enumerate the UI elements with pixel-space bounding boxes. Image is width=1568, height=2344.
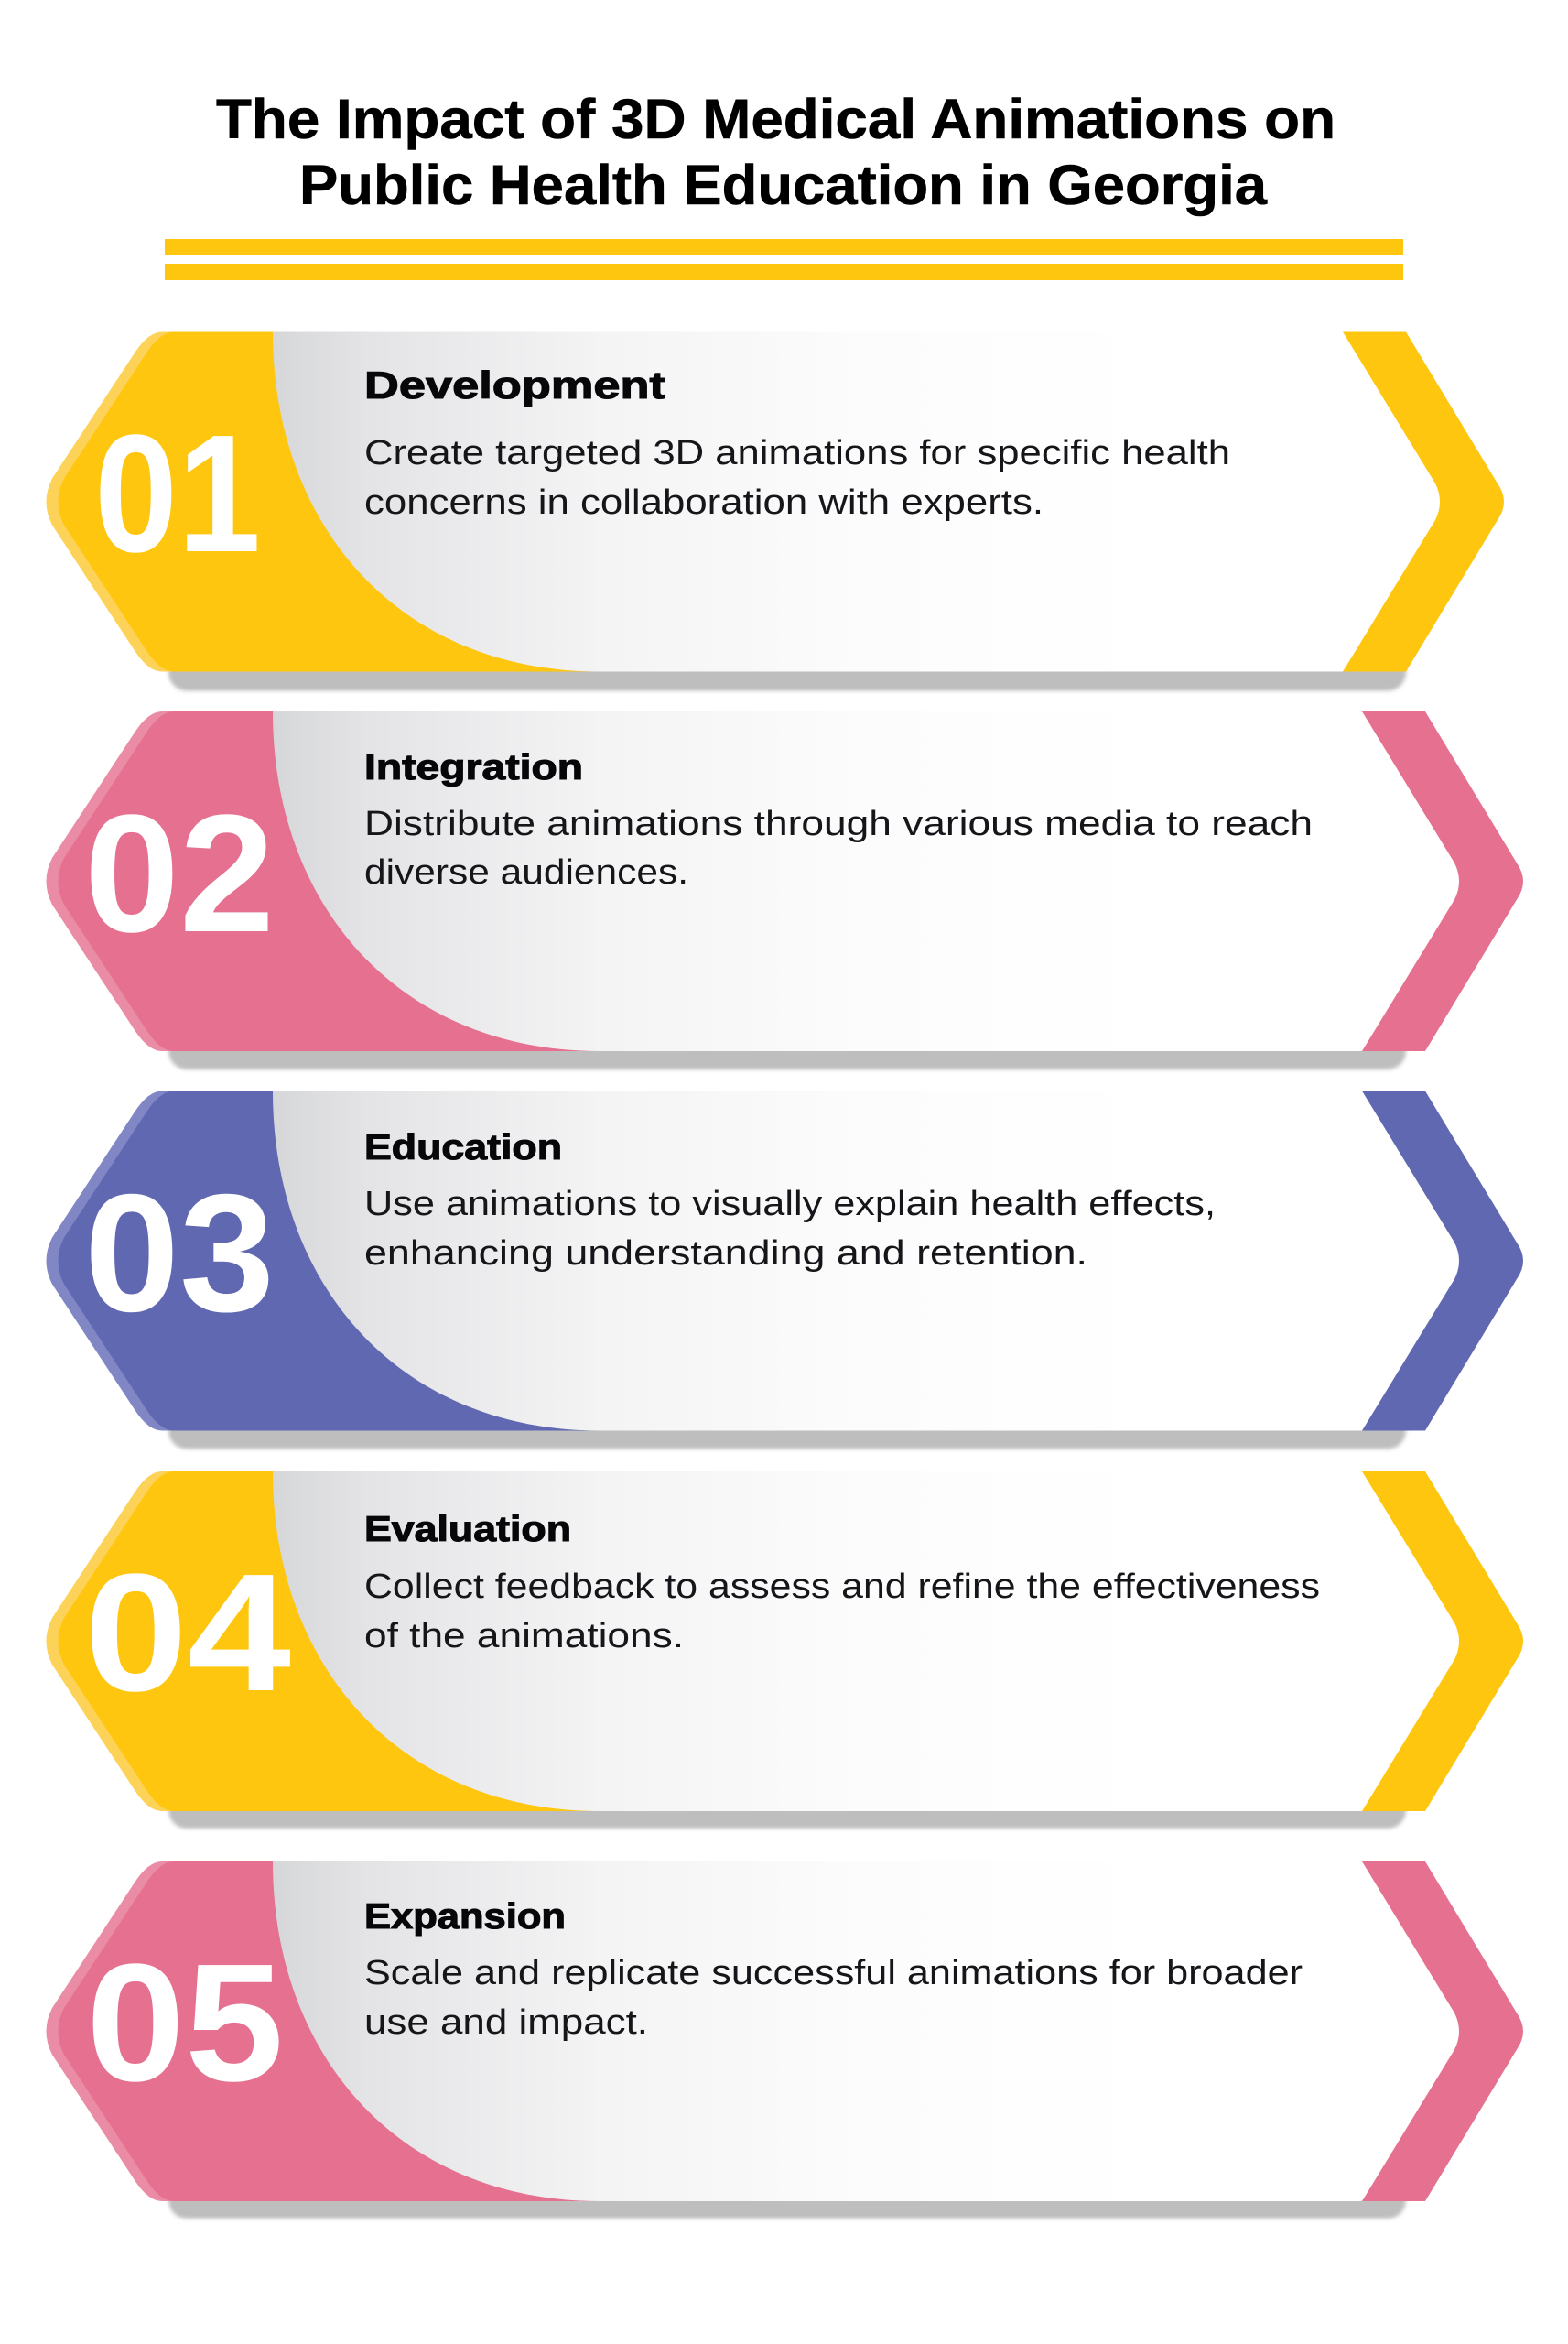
panel: step 04 evaluation: 04 (84, 1538, 291, 1726)
panel: step 03 education: Education (364, 1128, 562, 1167)
panel: step 03 education (46, 1091, 1523, 1449)
title (216, 88, 1336, 216)
panel: step 02 integration: diverse audiences. (364, 853, 688, 892)
panel: step 02 integration: 02 (84, 779, 275, 967)
panel: step 05 expansion: Scale and replicate successful animations for broader (364, 1954, 1303, 1992)
panel: step 05 expansion: 05 (86, 1928, 284, 2116)
panel: step 01 development: concerns in collaboration with experts. (364, 483, 1044, 522)
title: The Impact of 3D Medical Animations on (216, 88, 1336, 150)
panel: step 04 evaluation: Evaluation (364, 1510, 571, 1549)
panel: step 01 development: Create targeted 3D animations for specific health (364, 434, 1230, 472)
panel: step 05 expansion: use and impact. (364, 2003, 648, 2042)
panel: step 01 development: 01 (94, 399, 261, 587)
panel: step 05 expansion (46, 1861, 1523, 2219)
panel: step 03 education: Use animations to visually explain health effects, (364, 1185, 1216, 1223)
title: Public Health Education in Georgia (299, 154, 1268, 216)
panel: step 02 integration: Distribute animations through various media to reach (364, 805, 1313, 843)
panel: step 01 development: Development (364, 364, 665, 407)
panel: step 03 education: 03 (84, 1159, 275, 1346)
panel: step 04 evaluation (46, 1471, 1523, 1829)
panel: step 04 evaluation: Collect feedback to assess and refine the effectiveness (364, 1568, 1320, 1606)
panel: step 01 development (46, 331, 1504, 690)
panel: step 02 integration: Integration (364, 748, 583, 787)
panel: step 03 education: enhancing understanding and retention. (364, 1234, 1087, 1273)
panel: step 02 integration (46, 711, 1523, 1069)
panel: step 05 expansion: Expansion (364, 1897, 566, 1937)
panel: step 04 evaluation: of the animations. (364, 1617, 684, 1655)
title double rule (165, 239, 1403, 280)
